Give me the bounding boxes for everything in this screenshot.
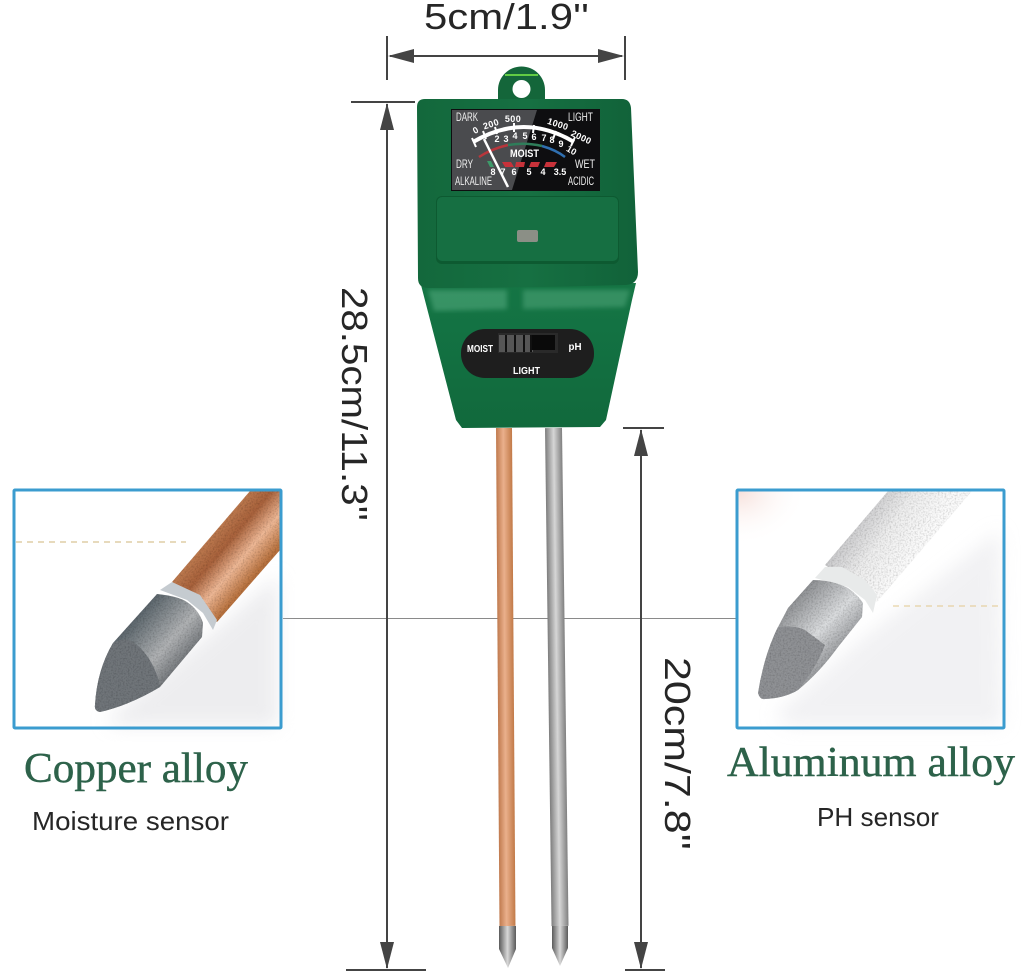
meter dial: 5 [526, 167, 532, 177]
meter dial: 3 [503, 134, 509, 144]
meter dial: 6 [531, 132, 537, 142]
panel: aluminium alloy close-up [737, 490, 1004, 728]
frame [737, 490, 1004, 728]
meter dial: 4 [512, 131, 518, 141]
band [815, 567, 877, 613]
upper housing [417, 99, 638, 288]
label: PH sensor: PH sensor [817, 802, 939, 832]
meter dial: 4 [540, 167, 546, 177]
lower tapered housing [421, 283, 636, 428]
shadow [105, 575, 278, 726]
cover plate [436, 196, 619, 264]
meter dial: LIGHT [568, 110, 593, 124]
mode switch plate: LIGHT [513, 366, 540, 377]
aluminium tube [825, 491, 972, 602]
highlight band [428, 290, 630, 311]
pink corner glow [738, 491, 808, 546]
meter dial: ALKALINE [455, 174, 492, 188]
meter dial: 5 [522, 131, 528, 141]
light sensor window [517, 230, 538, 242]
mode switch plate: MOIST [467, 344, 493, 355]
meter dial: 1000 [546, 116, 570, 132]
meter dial: 3.5 [554, 167, 566, 177]
meter dial: 0 [471, 125, 480, 136]
soil meter device [417, 66, 638, 968]
meter dial: 2 [494, 134, 500, 144]
meter dial: 7 [500, 167, 506, 177]
silver band [160, 582, 217, 630]
meter dial: 8 [490, 167, 496, 177]
dark nose of bullet [95, 640, 160, 712]
icon: hanging loop [498, 66, 545, 101]
dimension: width [387, 0, 625, 80]
probe: aluminium [545, 428, 569, 966]
copper tube [172, 491, 280, 622]
meter dial: 9 [558, 139, 564, 149]
guide line between insets [283, 618, 737, 620]
meter dial: WET [575, 157, 595, 171]
mode switch plate: pH [568, 342, 582, 353]
meter dial: DRY [456, 157, 473, 171]
dimension: total height: 28.5cm/11.3'' [334, 287, 375, 521]
heading: copper alloy: Copper alloy [24, 746, 248, 792]
dashed line [893, 605, 1003, 607]
meter dial: 2000 [569, 128, 593, 146]
meter dial: ACIDIC [568, 174, 594, 188]
probe: copper [496, 428, 516, 968]
meter dial: 7 [541, 133, 547, 143]
dimension: probe length [623, 428, 698, 970]
frame [14, 490, 281, 728]
meter dial: 6 [511, 167, 517, 177]
dashed line [16, 541, 186, 543]
meter dial [451, 109, 600, 191]
dimension: total height [334, 102, 426, 970]
dimension: probe length: 20cm/7.8'' [657, 657, 698, 850]
mode switch plate [461, 329, 594, 378]
meter dial: 8 [549, 135, 555, 145]
meter dial: 500 [505, 114, 521, 124]
shadow [775, 530, 1002, 726]
panel: copper alloy close-up [14, 490, 281, 728]
lead bullet [95, 594, 203, 712]
meter dial: MOIST [510, 148, 539, 160]
dark nose of bullet [758, 626, 825, 699]
lead bullet [758, 580, 863, 699]
meter dial: 10 [565, 144, 578, 157]
meter dial: DARK [456, 110, 478, 124]
heading: aluminum alloy: Aluminum alloy [727, 740, 1015, 786]
label: moisture sensor: Moisture sensor [32, 806, 229, 836]
meter dial: 200 [482, 117, 500, 131]
